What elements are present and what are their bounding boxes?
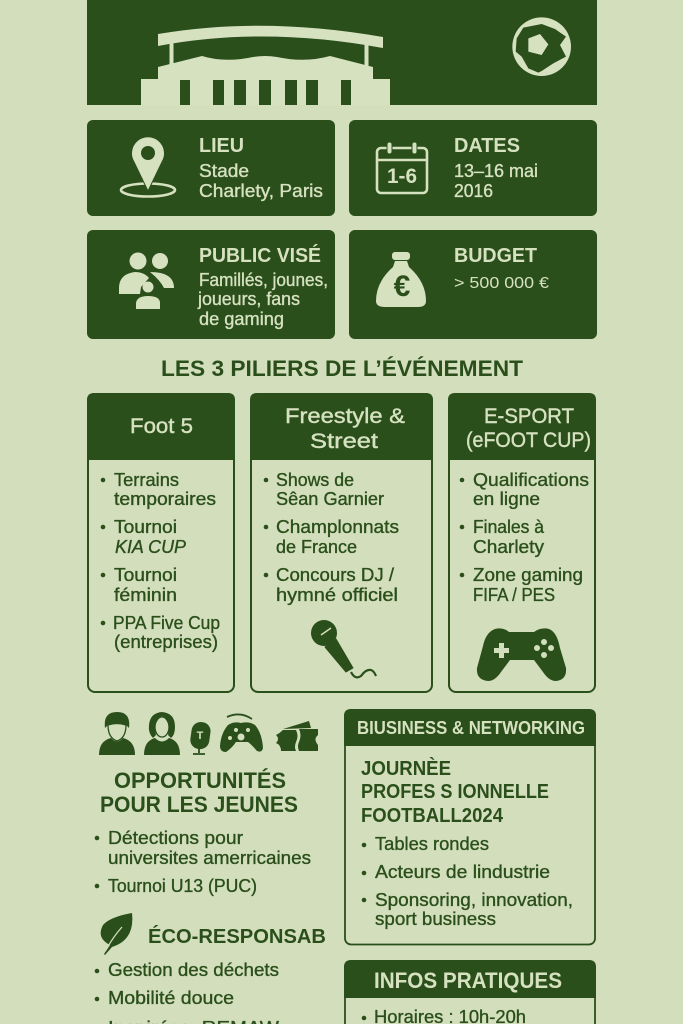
list: Shows de xyxy=(276,470,354,490)
list: en ligne xyxy=(473,489,540,509)
icon: leaf xyxy=(101,913,132,955)
card title: BUDGET xyxy=(454,245,537,267)
card text xyxy=(454,161,538,201)
list: éco-responsable: Gestion des déchets xyxy=(108,960,279,980)
icon: calendar xyxy=(377,142,427,193)
icon: small microphone xyxy=(189,721,212,754)
icon: microphone xyxy=(311,620,376,677)
icon: calendar: 1-6 xyxy=(387,165,417,188)
panel: infos pratiques xyxy=(344,960,596,1024)
list: féminin xyxy=(114,585,177,605)
list: Champlonnats xyxy=(276,517,399,537)
list: Concours DJ / xyxy=(276,565,394,585)
heading: opportunités: POUR LES JEUNES xyxy=(100,792,298,817)
list: Terrains xyxy=(114,470,179,490)
icon: stadium xyxy=(141,26,390,105)
card text: Stade xyxy=(199,161,249,181)
heading: opportunités xyxy=(100,768,298,817)
list: Qualifications xyxy=(473,470,589,490)
icons: youth activities xyxy=(99,712,318,755)
panel title xyxy=(466,405,591,452)
card: budget xyxy=(349,230,597,339)
panel: freestyle & street xyxy=(250,393,433,692)
list: Finales à xyxy=(473,517,545,537)
list: KIA CUP xyxy=(115,537,186,557)
panel title: Street xyxy=(310,430,378,453)
card title: DATES xyxy=(454,135,520,157)
list xyxy=(362,834,573,929)
list: FIFA / PES xyxy=(473,585,555,605)
heading: éco-responsable: ÉCO-RESPONSAB xyxy=(148,925,326,948)
card text: > 500 000 € xyxy=(454,275,549,292)
panel title: INFOS PRATIQUES xyxy=(374,968,562,993)
card title: PUBLIC VISÉ xyxy=(199,244,321,267)
list: Charlety xyxy=(473,537,544,557)
icon: location pin xyxy=(121,137,175,196)
panel: e-sport xyxy=(448,393,596,692)
card text: Famillés, jounes, xyxy=(199,270,328,290)
list: hymné officiel xyxy=(276,585,398,605)
list: Tables rondes xyxy=(375,834,489,854)
subheading xyxy=(361,757,549,827)
panel title: Foot 5 xyxy=(130,415,193,438)
list: opportunités xyxy=(95,828,311,896)
section heading: LES 3 PILIERS DE L’ÉVÉNEMENT xyxy=(161,356,524,381)
card text: 2016 xyxy=(454,181,493,201)
card text xyxy=(199,161,323,201)
panel: business & networking xyxy=(344,709,596,944)
list: (entreprises) xyxy=(114,632,218,652)
subheading: JOURNÈE xyxy=(361,757,451,780)
icon: tickets xyxy=(276,721,318,751)
list: Tournoi xyxy=(114,565,177,585)
list xyxy=(101,470,220,652)
icon: boy xyxy=(99,712,135,755)
list: opportunités: Détections pour xyxy=(108,828,243,848)
card text: 13–16 mai xyxy=(454,161,538,181)
list: Tournoi xyxy=(114,517,177,537)
card: public visé xyxy=(87,230,335,339)
list: PPA Five Cup xyxy=(113,613,220,633)
card title: LIEU xyxy=(199,135,244,157)
card text: Charlety, Paris xyxy=(199,181,323,201)
icon: gamepad xyxy=(477,628,566,681)
list xyxy=(264,470,399,605)
panel title xyxy=(285,405,405,453)
card text: de gaming xyxy=(199,309,284,329)
panel title: (eFOOT CUP) xyxy=(466,429,591,452)
list: Sêan Garnier xyxy=(276,489,384,509)
card text xyxy=(197,270,328,329)
subheading: PROFES S IONNELLE xyxy=(361,781,549,803)
list: Acteurs de lindustrie xyxy=(375,862,550,882)
icon: money bag xyxy=(376,252,426,307)
list: opportunités: universites amerricaines xyxy=(108,848,311,868)
list: éco-responsable: Mobilité douce xyxy=(108,988,234,1008)
list: Zone gaming xyxy=(473,565,583,585)
panel title: Freestyle & xyxy=(285,405,405,428)
panel title: BIUSINESS & NETWORKING xyxy=(357,718,585,738)
icon: football xyxy=(512,17,571,76)
list: opportunités: Tournoi U13 (PUC) xyxy=(108,876,257,896)
icon: small gamepad xyxy=(220,714,263,752)
list: éco-responsable xyxy=(95,960,279,1024)
panel title: E-SPORT xyxy=(484,405,574,428)
list: Sponsoring, innovation, xyxy=(375,890,573,910)
card text: joueurs, fans xyxy=(197,289,300,309)
card: dates xyxy=(349,120,597,216)
card: lieu xyxy=(87,120,335,216)
subheading: FOOTBALL2024 xyxy=(361,805,504,827)
panel: foot 5 xyxy=(87,393,235,692)
icon: small microphone: T xyxy=(197,730,204,742)
list xyxy=(460,470,589,605)
list: de France xyxy=(276,537,357,557)
icon: people xyxy=(119,252,174,309)
list: temporaires xyxy=(114,489,216,509)
icon: money bag: € xyxy=(394,270,411,303)
heading: opportunités: OPPORTUNITÉS xyxy=(114,768,286,793)
icon: girl xyxy=(144,712,180,755)
list: sport business xyxy=(375,909,496,929)
header banner xyxy=(87,0,597,105)
